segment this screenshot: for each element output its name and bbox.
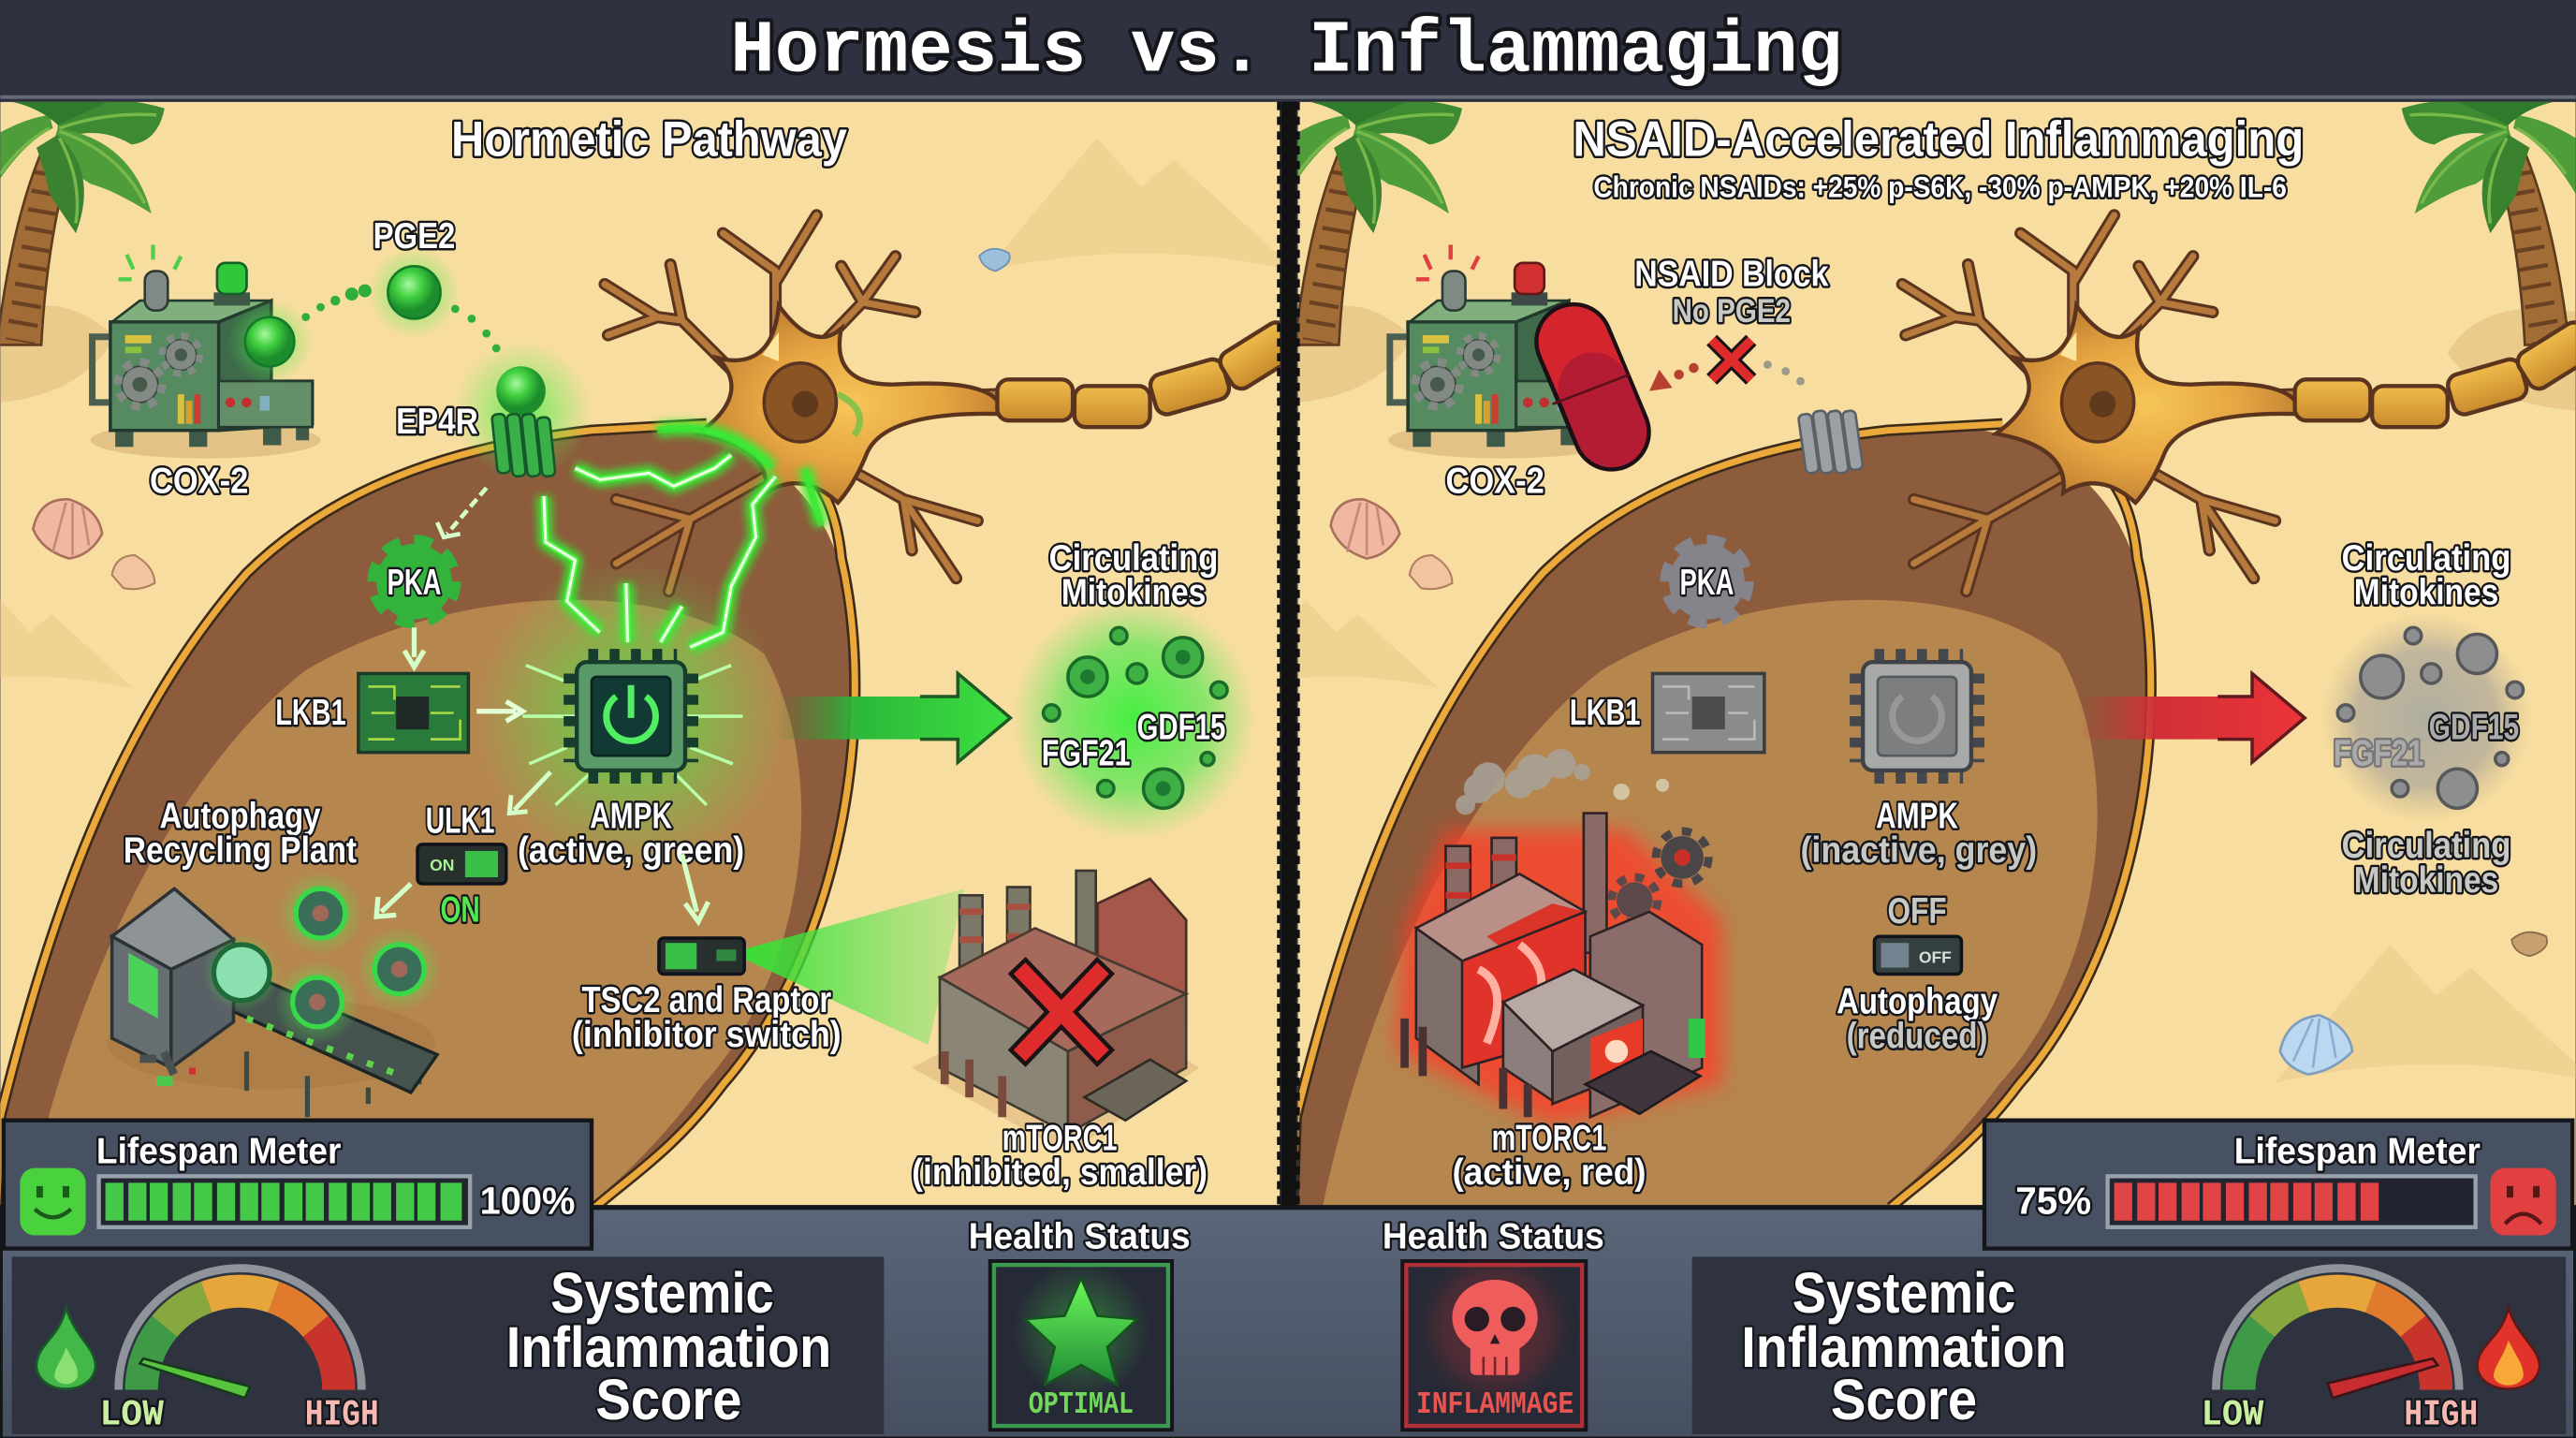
panel: right score (1692, 1256, 2566, 1435)
arrow: EP4R to PKA (437, 488, 487, 537)
icon: green inhibition beam (731, 888, 964, 1045)
arrow: ULK1 to plant (376, 884, 411, 917)
icon: LKB1 chip green (359, 673, 468, 753)
icon: mitokine cloud grey (2321, 613, 2531, 823)
icon: smoke (1456, 749, 1669, 814)
icon: autophagy switch off: OFF (1919, 947, 1952, 966)
label: circulating mitokines: Circulating (1049, 538, 1218, 579)
lightning bolts (544, 428, 822, 647)
panel: left lifespan meter (4, 1121, 592, 1249)
label: systemic inflammation score (1741, 1261, 2067, 1432)
label: PGE2: PGE2 (373, 216, 455, 257)
label: systemic inflammation score (506, 1261, 831, 1432)
label: COX-2: COX-2 (1445, 461, 1544, 501)
label: LKB1: LKB1 (1570, 693, 1640, 733)
label: autophagy recycling plant: Recycling Plant (124, 830, 357, 871)
label: NSAID block (1634, 254, 1829, 330)
label: COX-2: COX-2 (150, 461, 248, 501)
label: autophagy recycling plant (124, 796, 357, 871)
label: NSAID block: NSAID Block (1634, 254, 1829, 294)
label: systemic inflammation score: Systemic (550, 1261, 774, 1326)
divider (1279, 102, 1298, 1208)
badge: optimal: OPTIMAL (1029, 1387, 1134, 1423)
heading: NSAID-accelerated inflammaging: NSAID-Accelerated Inflammaging (1573, 112, 2304, 168)
label: 100 percent: 100% (480, 1180, 575, 1223)
label: NSAID block: No PGE2 (1673, 293, 1791, 330)
label: mTORC1 inhibited: mTORC1 (1003, 1118, 1118, 1158)
panel: left score (12, 1256, 884, 1435)
icon: red X over factory (1025, 975, 1097, 1049)
label: EP4R: EP4R (396, 402, 478, 442)
label: AMPK inactive (1800, 796, 2037, 871)
label: TSC2 and Raptor: TSC2 and Raptor (581, 980, 831, 1020)
icon: TSC2 switch (659, 938, 744, 975)
icon: mTORC1 factory inhibited (912, 871, 1199, 1153)
label: GDF15: GDF15 (1137, 708, 1225, 748)
shell decorations (1331, 499, 2547, 1075)
label: circulating mitokines (1049, 538, 1218, 613)
label: autophagy reduced (1837, 982, 1998, 1057)
badge: inflammage (1403, 1262, 1586, 1430)
label: systemic inflammation score: Inflammation (1741, 1315, 2067, 1380)
label: systemic inflammation score: Systemic (1793, 1261, 2015, 1326)
icon: green flame (37, 1308, 95, 1389)
arrow: PKA to LKB1 (404, 627, 424, 667)
icon: damaged mitochondria discs (274, 871, 442, 1045)
arrow head outline (920, 673, 1010, 762)
neuron (605, 215, 1302, 592)
label: systemic inflammation score: Inflammation (506, 1315, 831, 1380)
label: FGF21 grey: FGF21 (2334, 734, 2423, 774)
icon: EP4R receptor (454, 342, 592, 479)
gauge: high inflammation (2216, 1269, 2459, 1398)
panel: right lifespan meter (1984, 1121, 2572, 1249)
green streaks in neuron (657, 394, 860, 526)
bar: 75 percent (2108, 1176, 2476, 1227)
label: mTORC1 active: mTORC1 (1492, 1118, 1606, 1158)
icon: PKA gear grey (1666, 540, 1748, 623)
label: autophagy reduced: (reduced) (1847, 1017, 1988, 1057)
title rule (0, 95, 2576, 99)
label: OFF: OFF (1887, 891, 1947, 932)
label: mTORC1 inhibited: (inhibited, smaller) (912, 1152, 1208, 1193)
label: mTORC1 active (1452, 1118, 1647, 1193)
label: systemic inflammation score: Score (595, 1368, 742, 1432)
heading: hormetic pathway: Hormetic Pathway (451, 112, 847, 168)
icon: PGE2 molecule and dots (301, 246, 501, 352)
icon: frowny (2490, 1168, 2556, 1236)
label: TSC2 and Raptor (572, 980, 842, 1055)
label: AMPK active: AMPK (590, 796, 672, 836)
icon: autophagy switch off (1874, 936, 1961, 975)
label: autophagy recycling plant: Autophagy (160, 796, 321, 836)
bar: 100 percent (99, 1176, 470, 1227)
shell decorations (33, 249, 1010, 589)
label: autophagy reduced: Autophagy (1837, 982, 1998, 1022)
icon: blocked PGE2 X and dots (1649, 340, 1805, 391)
label: TSC2 and Raptor: (inhibitor switch) (572, 1015, 842, 1055)
arrow: red big (2078, 673, 2305, 762)
title: Hormesis vs. Inflammaging (730, 8, 1842, 93)
icon: smiley (20, 1168, 86, 1236)
label: AMPK active (518, 796, 744, 871)
label: health status optimal: Health Status (969, 1217, 1191, 1257)
label: circulating mitokines bottom (2342, 826, 2510, 901)
label: circulating mitokines top: Circulating (2342, 538, 2510, 579)
label: PKA: PKA (1680, 563, 1734, 603)
label: LOW: LOW (99, 1394, 165, 1435)
label: LOW: LOW (2202, 1394, 2264, 1435)
panel: hormetic pathway (0, 98, 1302, 1208)
icon: LKB1 chip grey (1653, 673, 1764, 753)
label: PKA: PKA (388, 563, 441, 603)
label: FGF21: FGF21 (1042, 734, 1131, 774)
label: circulating mitokines bottom: Mitokines (2354, 860, 2498, 901)
label: 75 percent: 75% (2015, 1180, 2091, 1223)
icon: mitokine cloud green (1012, 596, 1255, 840)
icon: AMPK chip grey (1856, 655, 1978, 777)
arrow: green big (776, 673, 1010, 762)
label: AMPK inactive: AMPK (1876, 796, 1958, 836)
label: mTORC1 active: (active, red) (1452, 1152, 1647, 1193)
label: HIGH: HIGH (305, 1394, 379, 1435)
icon: ULK1 switch on: ON (430, 856, 454, 874)
icon: red NSAID pill (1553, 342, 1630, 432)
badge: inflammage: INFLAMMAGE (1416, 1387, 1573, 1423)
icon: red flame (2477, 1308, 2539, 1389)
label: ULK1: ULK1 (426, 801, 494, 842)
label: ON: ON (441, 889, 480, 930)
icon: COX-2 machine active (91, 244, 320, 459)
label: health status inflammage: Health Status (1383, 1217, 1604, 1257)
arrow: AMPK to TSC2 (682, 854, 709, 921)
label: circulating mitokines top (2342, 538, 2510, 613)
label: lifespan meter: Lifespan Meter (2234, 1131, 2481, 1171)
icon: AMPK glow (475, 560, 787, 873)
icon: COX-2 machine blocked (1388, 244, 1618, 459)
label: LKB1: LKB1 (275, 693, 346, 733)
label: mTORC1 inhibited (912, 1118, 1208, 1193)
icon: mTORC1 factory active (1397, 814, 1721, 1125)
label: circulating mitokines top: Mitokines (2354, 573, 2498, 613)
neuron (1902, 215, 2576, 592)
gauge: low inflammation (119, 1269, 361, 1398)
label: HIGH: HIGH (2404, 1394, 2478, 1435)
icon: ULK1 switch on (417, 844, 506, 884)
icon: grey receptor (1798, 410, 1863, 474)
icon: autophagy recycling plant (107, 888, 437, 1117)
arrow head outline (2217, 673, 2305, 762)
icon: AMPK chip active (522, 655, 742, 805)
label: AMPK inactive: (inactive, grey) (1800, 830, 2037, 871)
label: systemic inflammation score: Score (1831, 1368, 1977, 1432)
top title bar (0, 0, 2576, 102)
label: AMPK active: (active, green) (518, 830, 744, 871)
badge: optimal (990, 1262, 1171, 1430)
label: GDF15 grey: GDF15 (2429, 708, 2519, 748)
label: circulating mitokines: Mitokines (1061, 573, 1206, 613)
label: circulating mitokines bottom: Circulating (2342, 826, 2510, 866)
label: lifespan meter: Lifespan Meter (96, 1131, 341, 1171)
subheading: chronic NSAID stats: Chronic NSAIDs: +25% p-S6K, -30% p-AMPK, +20% IL-6 (1593, 170, 2287, 204)
panel: NSAID-accelerated inflammaging (1232, 98, 2576, 1208)
icon: PKA gear green (373, 540, 455, 623)
bottom dashboard (0, 1208, 2576, 1438)
arrow: AMPK to ULK1 (509, 772, 550, 814)
arrow: LKB1 to AMPK (476, 701, 522, 721)
